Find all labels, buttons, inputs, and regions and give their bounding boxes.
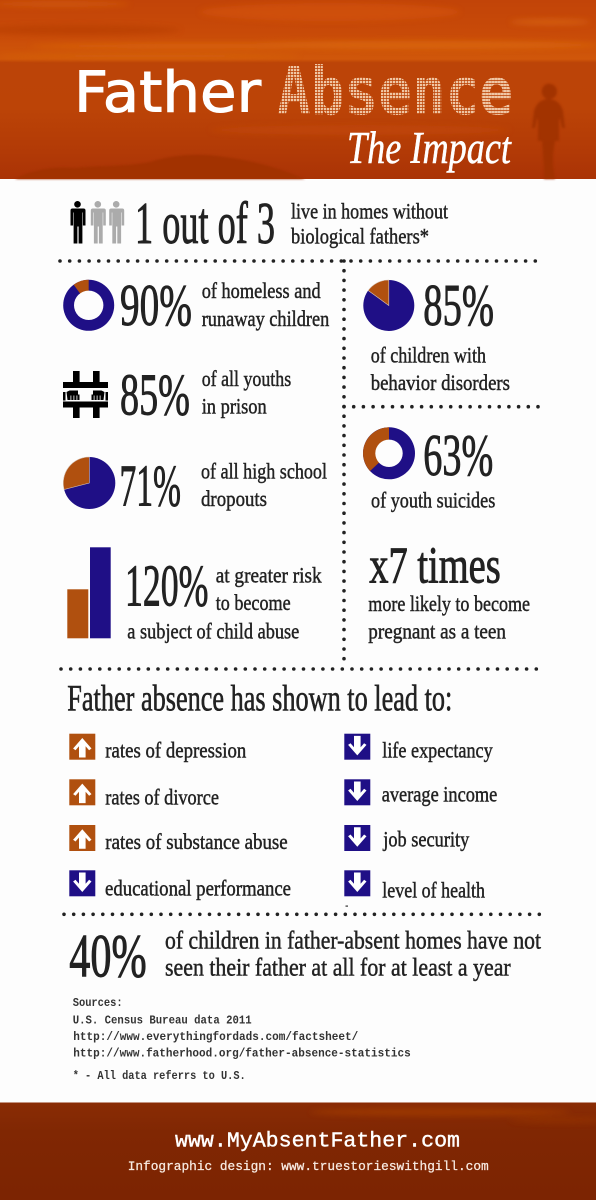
chart: two bars xyxy=(67,547,111,638)
text: to become: to become xyxy=(216,590,291,615)
item: rates of substance abuse xyxy=(69,825,288,854)
text: in prison: in prison xyxy=(202,393,267,418)
item: average income xyxy=(344,779,497,807)
chart: pie 71% xyxy=(63,457,115,509)
sources xyxy=(73,996,411,1083)
figure: 120%: 120% xyxy=(125,553,208,619)
footer url: www.MyAbsentFather.com xyxy=(175,1130,460,1154)
footer banner xyxy=(0,1102,596,1200)
sources: Sources: xyxy=(73,996,123,1010)
text: youths: of all youths xyxy=(202,366,291,391)
text: line 2: seen their father at all for at least a year xyxy=(165,955,511,982)
stat: 90% homeless xyxy=(63,272,329,338)
icon: prison bars xyxy=(63,371,108,418)
chart: donut 63% xyxy=(363,427,415,479)
title: Father: Father xyxy=(74,60,262,126)
item: life expectancy xyxy=(344,734,493,763)
chart: pie 85% xyxy=(363,280,414,331)
item: average income: average income xyxy=(382,782,497,807)
item: educational performance: educational performance xyxy=(105,876,291,901)
stat: 63% suicides xyxy=(363,422,495,512)
stat: 71% dropouts xyxy=(63,452,327,518)
item: job security xyxy=(344,825,469,852)
stat: 1 out of 3 xyxy=(70,190,448,256)
footer credit: Infographic design: www.truestorieswithgill.com xyxy=(128,1159,489,1174)
stat: x7 times xyxy=(368,537,530,643)
item: rates of depression: rates of depression xyxy=(105,737,246,762)
item: educational performance xyxy=(69,870,291,901)
heading: Father absence has shown to lead to: xyxy=(67,679,452,720)
text: pregnant: pregnant as a teen xyxy=(368,618,506,643)
item: rates of divorce xyxy=(69,779,219,809)
title: Absence (dot matrix): Absence xyxy=(277,53,513,130)
shoreline mound xyxy=(15,155,305,179)
text: children: of children with xyxy=(371,343,486,368)
text: more likely: more likely to become xyxy=(368,591,530,616)
figure: 40%: 40% xyxy=(69,924,147,991)
sources: * - All data referrs to U.S. xyxy=(73,1069,246,1083)
figure: 90%: 90% xyxy=(120,272,192,338)
stat: 85% behavior xyxy=(363,272,510,395)
figure: 85%: 85% xyxy=(423,272,494,338)
item: level of health xyxy=(344,870,485,902)
text: suicides: of youth suicides xyxy=(371,487,495,512)
sources: U.S. Census Bureau data 2011 xyxy=(73,1013,252,1027)
subtitle: The Impact: The Impact xyxy=(347,123,512,173)
text: dropouts: dropouts xyxy=(201,486,267,511)
section: father absence leads to xyxy=(67,679,497,902)
text: runaway: runaway children xyxy=(202,306,329,331)
item: life expectancy: life expectancy xyxy=(382,738,493,763)
item: rates of depression xyxy=(69,734,246,762)
figure: 85%: 85% xyxy=(120,362,190,428)
text: high school: of all high school xyxy=(201,458,327,483)
figure: 71%: 71% xyxy=(120,452,181,518)
text: child abuse: a subject of child abuse xyxy=(127,618,299,643)
child silhouette xyxy=(532,84,565,179)
text: homeless: of homeless and xyxy=(202,278,321,303)
figure: x7 times: x7 times xyxy=(369,537,501,594)
item: rates of divorce: rates of divorce xyxy=(105,784,219,809)
chart: donut 90% xyxy=(63,280,114,331)
item: job security: job security xyxy=(382,827,469,852)
text: live in homes: live in homes without xyxy=(291,198,448,224)
sources: http://www.everythingfordads.com/factsheet/ xyxy=(73,1030,358,1044)
item: level of health: level of health xyxy=(382,877,485,902)
text: behavior: behavior disorders xyxy=(371,370,510,395)
figure: 1 out of 3: 1 out of 3 xyxy=(135,190,275,256)
icon: three people xyxy=(70,201,124,244)
text: greater risk: at greater risk xyxy=(216,563,322,588)
header banner xyxy=(0,0,596,179)
stat: 120% child abuse xyxy=(67,547,322,643)
stat: 40% xyxy=(69,924,541,991)
text: line 1: of children in father-absent homes have not xyxy=(165,927,541,954)
sources: http://www.fatherhood.org/father-absence-statistics xyxy=(73,1047,411,1061)
figure: 63%: 63% xyxy=(423,422,493,488)
stat: 85% prison xyxy=(63,362,291,428)
item: rates of substance abuse: rates of substance abuse xyxy=(105,829,288,854)
text: biological fathers: biological fathers* xyxy=(291,224,429,248)
